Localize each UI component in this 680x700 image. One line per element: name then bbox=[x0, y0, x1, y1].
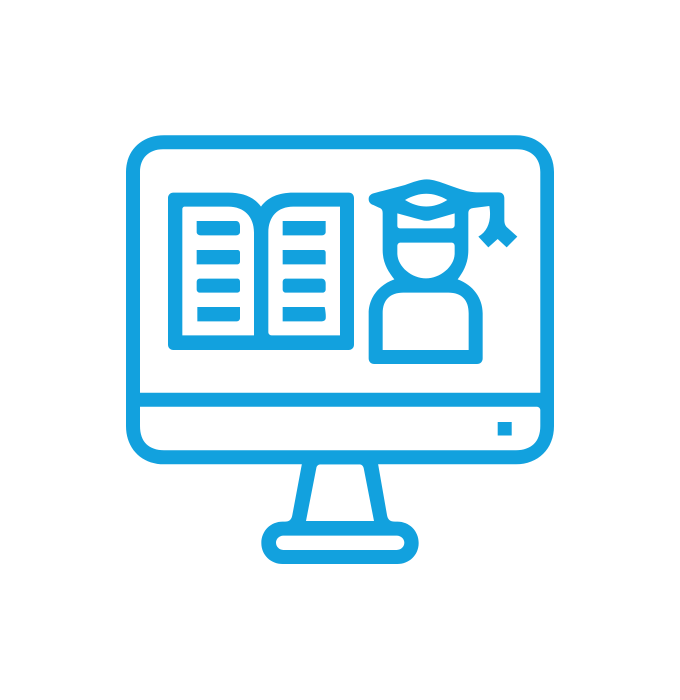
icon: monitor stand and base bbox=[261, 462, 419, 564]
book text lines: right page bbox=[283, 221, 326, 321]
icon: open book bbox=[168, 193, 354, 350]
icon: graduate with mortarboard cap bbox=[369, 179, 517, 364]
icon: monitor frame bbox=[126, 135, 554, 464]
icon: power indicator square bbox=[498, 422, 512, 436]
book text lines: left page bbox=[197, 221, 240, 321]
